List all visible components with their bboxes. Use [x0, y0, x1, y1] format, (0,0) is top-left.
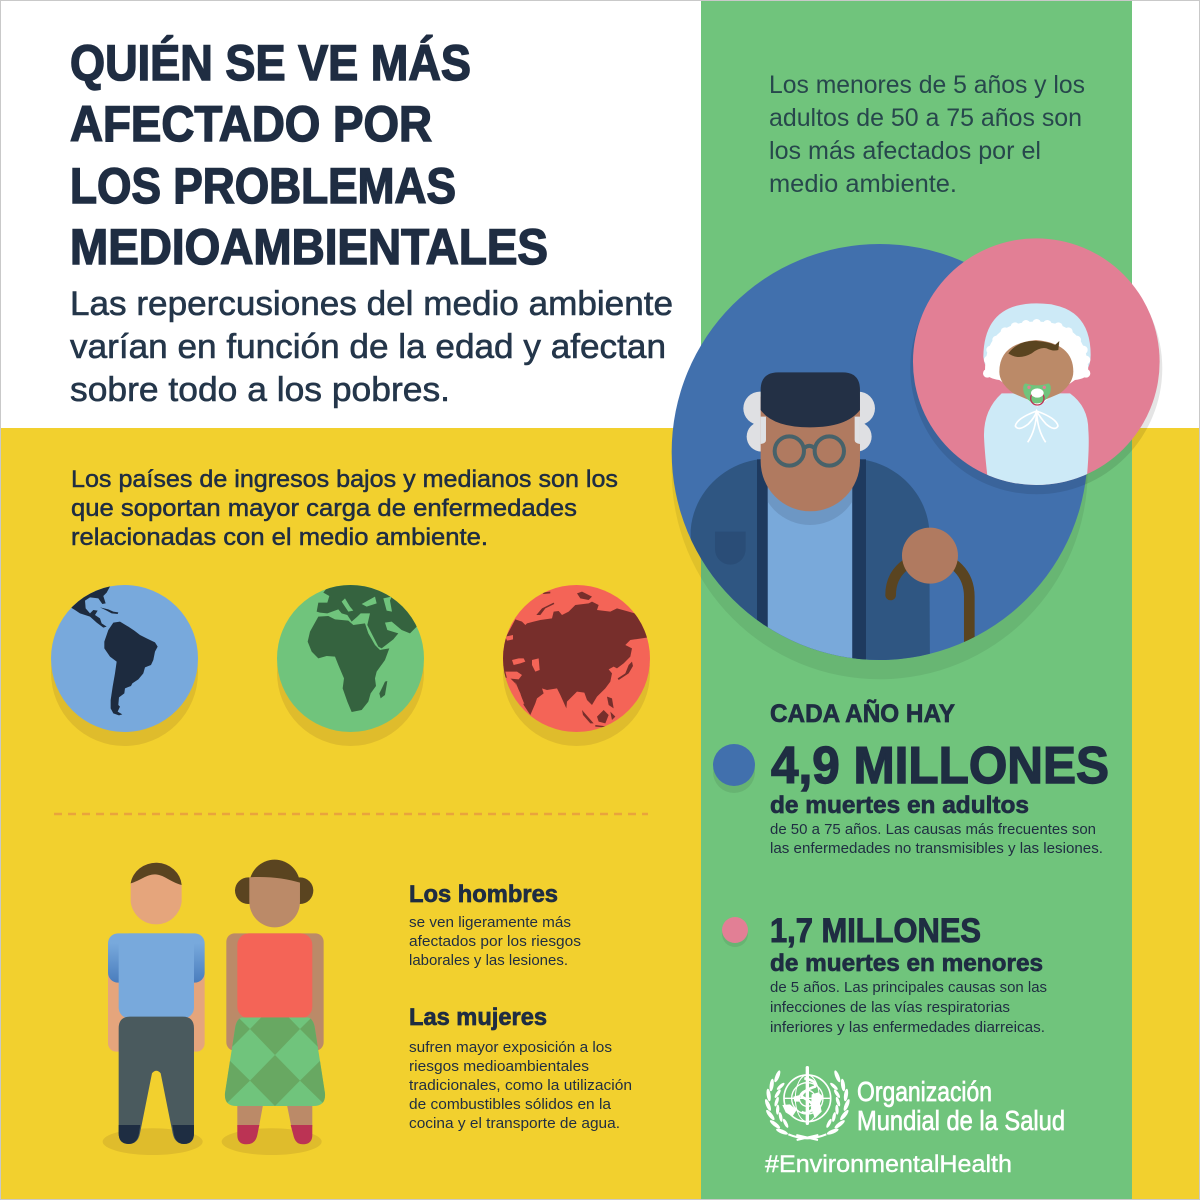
stat: 1,7 million children: 1,7 MILLONES	[770, 912, 981, 950]
stat: 1,7 million children: inferiores y las enfermedades diarreicas.	[770, 1019, 1045, 1036]
globe: Asia	[499, 585, 654, 746]
elderly man	[691, 372, 969, 673]
stat dot: adults	[713, 744, 755, 793]
globe: Africa	[277, 582, 424, 746]
stat: 1,7 million children	[770, 912, 1047, 1036]
title: QUIÉN SE VE MÁS	[70, 35, 471, 91]
figure: man	[103, 863, 205, 1155]
stat: 1,7 million children: de muertes en menores	[770, 950, 1043, 977]
logo: WHO wordmark: Organización	[857, 1076, 992, 1107]
text: men and women: tradicionales, como la utilización	[409, 1077, 632, 1094]
stat: 4,9 million adults: 4,9 MILLONES	[771, 737, 1109, 795]
intro text: most affected ages: medio ambiente.	[769, 170, 957, 198]
subtitle	[70, 285, 673, 409]
text: men and women: sufren mayor exposición a los	[409, 1039, 612, 1056]
subtitle: Las repercusiones del medio ambiente	[70, 285, 673, 323]
subtitle: sobre todo a los pobres.	[70, 371, 450, 409]
title: AFECTADO POR	[70, 96, 432, 152]
intro text: most affected ages: adultos de 50 a 75 años son	[769, 104, 1082, 132]
stat: 4,9 million adults: las enfermedades no transmisibles y las lesiones.	[770, 840, 1103, 857]
title: LOS PROBLEMAS	[70, 158, 456, 214]
stat: 4,9 million adults	[770, 698, 1109, 857]
intro text: most affected ages	[769, 71, 1085, 198]
text: men and women: Los hombres	[409, 881, 558, 908]
hashtag: #EnvironmentalHealth	[765, 1151, 1012, 1178]
text: men and women: cocina y el transporte de agua.	[409, 1115, 620, 1132]
text: men and women: riesgos medioambientales	[409, 1058, 589, 1075]
logo: WHO wordmark	[857, 1076, 1065, 1136]
text: low and middle income countries: Los países de ingresos bajos y medianos son los	[71, 466, 618, 493]
stat: 4,9 million adults: de 50 a 75 años. Las causas más frecuentes son	[770, 821, 1096, 838]
text: men and women: Las mujeres	[409, 1004, 547, 1031]
stat: 4,9 million adults: CADA AÑO HAY	[770, 698, 955, 728]
logo: WHO wordmark: Mundial de la Salud	[857, 1105, 1065, 1136]
illustration: elderly man and baby	[672, 238, 1162, 679]
subtitle: varían en función de la edad y afectan	[70, 328, 666, 366]
title	[70, 35, 548, 275]
stat: 4,9 million adults: de muertes en adultos	[770, 792, 1029, 819]
intro text: most affected ages: Los menores de 5 años y los	[769, 71, 1085, 99]
text: men and women	[409, 881, 632, 1132]
text: men and women: se ven ligeramente más	[409, 914, 571, 931]
baby	[983, 303, 1091, 497]
text: men and women: laborales y las lesiones.	[409, 952, 568, 969]
stat: 1,7 million children: de 5 años. Las principales causas son las	[770, 979, 1047, 996]
title: MEDIOAMBIENTALES	[70, 219, 548, 275]
figure: woman	[222, 860, 326, 1155]
intro text: most affected ages: los más afectados por el	[769, 137, 1041, 165]
divider	[54, 813, 648, 815]
text: men and women: de combustibles sólidos en la	[409, 1096, 612, 1113]
text: low and middle income countries	[71, 466, 618, 551]
logo: WHO emblem	[764, 1068, 851, 1140]
globe: Americas	[51, 583, 198, 746]
text: low and middle income countries: que soportan mayor carga de enfermedades	[71, 495, 577, 522]
stat: 1,7 million children: infecciones de las vías respiratorias	[770, 999, 1010, 1016]
stat dot: children	[722, 917, 748, 947]
text: men and women: afectados por los riesgos	[409, 933, 581, 950]
text: low and middle income countries: relacionadas con el medio ambiente.	[71, 524, 488, 551]
